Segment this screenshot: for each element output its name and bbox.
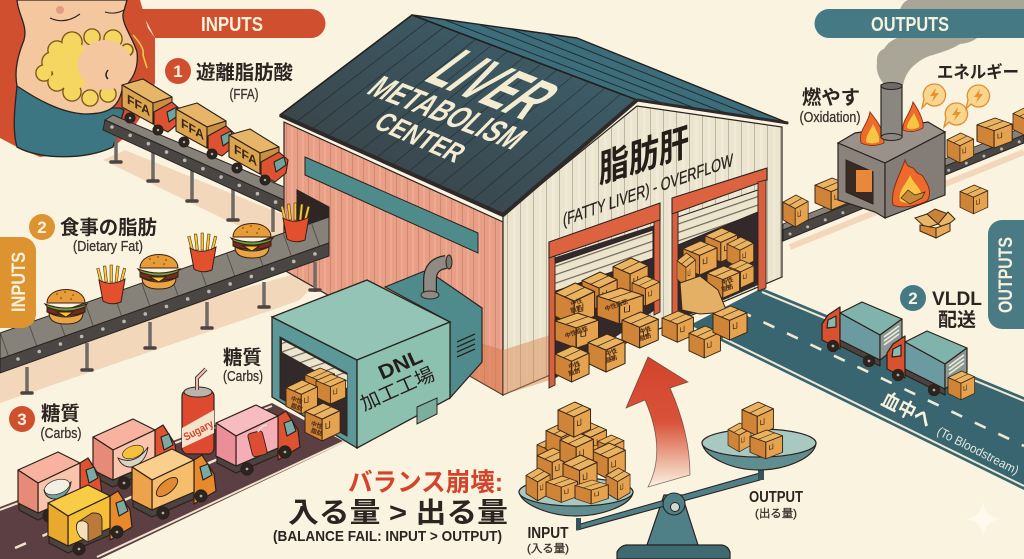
- right pan: [702, 429, 816, 470]
- label: oxidation: 燃やす: [802, 87, 860, 109]
- top face: [272, 280, 450, 360]
- right flame: [903, 102, 923, 132]
- beam: [577, 473, 760, 530]
- VLDL trucks: [822, 302, 975, 400]
- window band: [305, 157, 478, 253]
- boxes overflowing left door: 脂肪: [638, 331, 652, 343]
- balance callout: バランス崩壊:: [348, 469, 503, 497]
- furnace body: [838, 122, 945, 163]
- label 2: dietary fat: (Dietary Fat): [73, 238, 143, 255]
- food on conveyor: [45, 203, 310, 324]
- left flame: [860, 112, 884, 146]
- boxes overflowing left door: 中性: [604, 346, 618, 358]
- boxes overflowing left door: 脂肪: [569, 303, 583, 315]
- pivot: [663, 493, 685, 515]
- left face: [272, 317, 357, 448]
- conveyor 3: oxidation: [783, 107, 1024, 247]
- energy bolts: [922, 84, 990, 127]
- label 3: carbs: [9, 403, 82, 442]
- road text: [878, 388, 1021, 478]
- side doorway: [297, 190, 329, 250]
- label: output: (出る量): [755, 507, 797, 520]
- heading: OUTPUTS side pill: [988, 220, 1024, 329]
- doorway: [280, 337, 347, 436]
- DNL boxes: 脂肪: [310, 426, 324, 438]
- balance callout: 入る量 > 出る量: [288, 497, 508, 528]
- crushed box: [680, 276, 727, 314]
- label 1: FFA: [165, 58, 294, 103]
- label 2: dietary fat: [29, 214, 157, 255]
- exhaust pipe: [421, 255, 452, 299]
- balance callout: [273, 469, 508, 545]
- box labels: 中性脂肪: [604, 297, 629, 313]
- furnace door: [846, 160, 873, 204]
- soda can: Sugary: [182, 418, 216, 444]
- label 2: dietary fat: 食事の脂肪: [60, 217, 157, 239]
- DNL boxes: 中性: [310, 419, 324, 431]
- roof title: METABOLISM: METABOLISM: [359, 70, 535, 156]
- label 2: VLDL delivery: VLDL: [932, 289, 982, 310]
- boxes overflowing right door: 中性: [720, 275, 734, 287]
- truck: rice bowl: [18, 452, 102, 522]
- truck: soda: [216, 405, 300, 475]
- fat deposits: [36, 29, 133, 106]
- label 1: FFA: 1: [173, 62, 183, 81]
- label: carbs to DNL: [223, 347, 263, 385]
- boxes overflowing left door: 中性: [569, 296, 583, 308]
- smoke cloud: [877, 0, 1024, 85]
- chimney: [881, 85, 902, 137]
- label: input: INPUT: [528, 525, 569, 542]
- roof title: CENTER: CENTER: [368, 106, 473, 168]
- label: input: (入る量): [527, 542, 569, 555]
- truck: baguette: [132, 449, 216, 519]
- FFA trucks: FFA: [234, 141, 257, 169]
- label 3: carbs: 糖質: [41, 403, 80, 425]
- label: oxidation: [800, 87, 861, 126]
- input boxes stack: [526, 402, 630, 504]
- balance scale: [519, 402, 816, 559]
- vent: [457, 334, 475, 357]
- shadows under conveyors: [0, 150, 335, 403]
- sparkle watermark: [965, 501, 1001, 537]
- label 3: carbs: 3: [17, 410, 27, 429]
- right roof plane: [412, 15, 788, 123]
- label: input: [527, 525, 569, 555]
- boxes overflowing right door: [662, 228, 754, 358]
- boxes overflowing right door: 脂肪: [720, 282, 734, 294]
- heading: INPUTS side pill: [0, 237, 36, 328]
- label 2: VLDL delivery: 配送: [938, 309, 976, 331]
- FFA trucks: FFA: [181, 115, 204, 143]
- label 2: dietary fat: 2: [37, 218, 47, 237]
- label: output: OUTPUT: [749, 489, 803, 506]
- jeans: [14, 86, 124, 157]
- heading: INPUTS top pill: INPUTS: [201, 14, 263, 36]
- FFA trucks: FFA: [127, 91, 150, 119]
- road text: 血中へ: [878, 388, 935, 433]
- fire: [892, 160, 930, 207]
- panel: fatty belly illustration: [0, 0, 155, 157]
- conveyor 2: dietary fat: [0, 217, 329, 393]
- truck: noodle bowl: [93, 419, 177, 489]
- label: output: [749, 489, 803, 520]
- panel: liver warehouse building: [280, 15, 788, 395]
- heading: OUTPUTS side pill: OUTPUTS: [996, 237, 1017, 313]
- wall title: fatty liver: 脂肪肝: [599, 120, 689, 191]
- wall subtitle: overflow: (FATTY LIVER) - OVERFLOW: [563, 150, 733, 230]
- boxes overflowing left door: 中性脂肪: [564, 324, 589, 340]
- heading: INPUTS side pill: INPUTS: [9, 252, 30, 312]
- label 3: carbs: (Carbs): [40, 425, 82, 442]
- label 2: VLDL delivery: 2: [908, 289, 918, 308]
- belly skin: [16, 0, 137, 114]
- soda can: [182, 369, 216, 454]
- road: VLDL to bloodstream: [690, 288, 1024, 490]
- label: carbs to DNL: (Carbs): [223, 368, 263, 385]
- DNL boxes: 脂肪: [290, 401, 304, 413]
- left loading door: [549, 203, 660, 388]
- label 1: FFA: (FFA): [230, 86, 258, 103]
- furnace: [838, 82, 945, 218]
- right loading door: [672, 168, 767, 320]
- DNL boxes: 中性: [290, 394, 304, 406]
- boxes overflowing left door: 脂肪: [604, 353, 618, 365]
- label: carbs to DNL: 糖質: [223, 347, 262, 369]
- label 1: FFA: 遊離脂肪酸: [196, 62, 294, 84]
- panel: DNL factory: [272, 255, 482, 448]
- rear unit: [385, 270, 482, 398]
- right face: [357, 322, 450, 448]
- heading: INPUTS top pill: [140, 9, 326, 38]
- boxes overflowing left door: 中性: [567, 359, 581, 371]
- road: carbs: [0, 403, 345, 559]
- FFA trucks: [122, 79, 288, 185]
- boxes overflowing left door: 中性: [638, 324, 652, 336]
- output boxes stack: [728, 402, 783, 459]
- left wall: [284, 122, 503, 395]
- road text: (To Bloodstream): [935, 424, 1021, 478]
- wall rust: [440, 330, 503, 395]
- heading: OUTPUTS top pill: OUTPUTS: [871, 14, 949, 36]
- label: energy: エネルギー: [937, 63, 1019, 82]
- panel: DNL factory: 加工工場: [357, 363, 438, 416]
- front wall: [503, 106, 782, 395]
- carb trucks: [18, 369, 300, 555]
- boxes overflowing left door: [555, 258, 660, 382]
- label 2: VLDL delivery: [900, 285, 982, 331]
- service door: [417, 398, 437, 424]
- boxes overflowing left door: 脂肪: [567, 366, 581, 378]
- truck: bread loaf: [48, 485, 132, 555]
- loose boxes by furnace: [915, 185, 988, 238]
- heading: OUTPUTS top pill: [814, 9, 1024, 38]
- left pan: [519, 478, 633, 516]
- DNL boxes: [286, 368, 346, 441]
- arrow: rising imbalance: [626, 357, 690, 487]
- label: oxidation: (Oxidation): [800, 109, 861, 126]
- left roof plane: [280, 15, 637, 215]
- stand: [647, 495, 698, 545]
- factory label: DNL: [375, 346, 426, 385]
- roof title: LIVER: LIVER: [408, 40, 577, 130]
- conveyor 1: FFA: [103, 115, 284, 232]
- balance callout: (BALANCE FAIL: INPUT > OUTPUT): [273, 528, 502, 545]
